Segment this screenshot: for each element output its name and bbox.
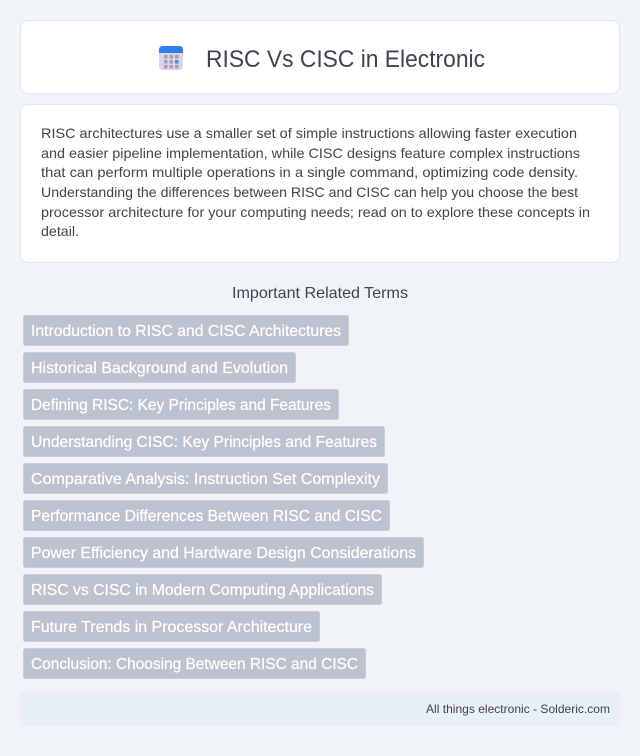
tag: understanding CISC: Understanding CISC: Key Principles and Features bbox=[31, 434, 377, 451]
text block: introduction paragraph bbox=[41, 125, 590, 239]
footer bbox=[20, 692, 620, 726]
tag: performance bbox=[24, 500, 390, 530]
tag: future trends: Future Trends in Processor Architecture bbox=[31, 619, 312, 636]
panel: introduction bbox=[20, 104, 620, 262]
panel: header bbox=[20, 20, 620, 94]
title: RISC Vs CISC in Electronic bbox=[206, 46, 485, 73]
tag: introduction: Introduction to RISC and CISC Architectures bbox=[31, 323, 341, 340]
tag: defining RISC: Defining RISC: Key Principles and Features bbox=[31, 397, 331, 414]
tag: history bbox=[24, 352, 296, 382]
heading: important related terms: Important Related Terms bbox=[232, 285, 408, 302]
tag: introduction bbox=[24, 316, 348, 346]
tag: comparative analysis bbox=[24, 464, 388, 494]
tag: comparative analysis: Comparative Analysis: Instruction Set Complexity bbox=[31, 471, 380, 488]
tag: history: Historical Background and Evolution bbox=[31, 360, 288, 377]
tag: conclusion bbox=[24, 648, 366, 678]
footer credit: All things electronic - Solderic.com bbox=[426, 702, 610, 716]
tag: performance: Performance Differences Between RISC and CISC bbox=[31, 508, 382, 525]
tag: conclusion: Conclusion: Choosing Between RISC and CISC bbox=[31, 656, 358, 673]
tag: power efficiency: Power Efficiency and Hardware Design Considerations bbox=[31, 545, 416, 562]
list: related term tags bbox=[24, 316, 424, 678]
tag: modern computing: RISC vs CISC in Modern Computing Applications bbox=[31, 582, 374, 599]
tag: modern computing bbox=[24, 574, 382, 604]
tag: understanding CISC bbox=[24, 426, 384, 456]
text block: introduction paragraph: RISC architectures use a smaller set of simple instructions allowing faster execution bbox=[41, 125, 577, 141]
text block: introduction paragraph: processor architecture for your computing needs; read on to explore these concepts in bbox=[41, 204, 590, 220]
tag: future trends bbox=[24, 612, 320, 642]
text block: introduction paragraph: that can perform multiple operations in a single command, optimizing code density. bbox=[41, 164, 578, 180]
text block: introduction paragraph: detail. bbox=[41, 223, 79, 239]
text block: introduction paragraph: and easier pipeline implementation, while CISC designs feature complex instructions bbox=[41, 145, 580, 161]
icon: calendar bbox=[159, 46, 183, 70]
text block: introduction paragraph: Understanding the differences between RISC and CISC can help you choose the best bbox=[41, 184, 578, 200]
tag: defining RISC bbox=[24, 390, 338, 420]
tag: power efficiency bbox=[24, 538, 424, 568]
